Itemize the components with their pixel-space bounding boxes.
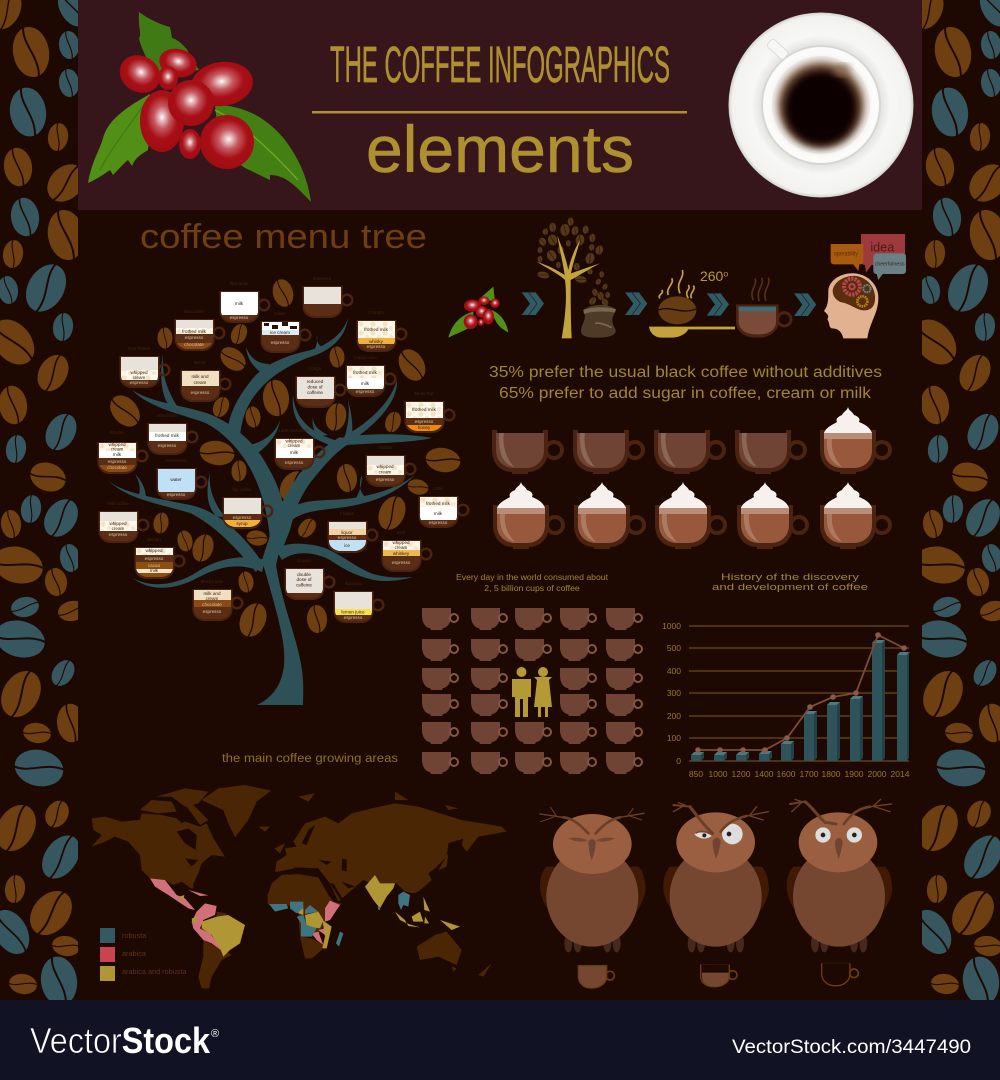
menu cups: whipped [109,521,127,526]
heading: coffee menu tree: coffee menu tree [140,218,427,256]
chart: history of coffee: 1000 [662,621,681,631]
robusta regions [269,892,410,947]
menu cups: espresso [338,535,357,540]
menu cups: whisky [369,339,384,344]
land [92,785,507,988]
menu cups: milk and [203,591,221,596]
chart: history of coffee: 400 [667,666,681,676]
menu cups: espresso [158,443,177,448]
pictogram: cup grid with people [422,608,642,774]
footer bar: ® [211,1028,219,1040]
menu cups: milk [290,450,299,455]
process: from berry to brain [448,217,906,338]
world map [92,785,507,988]
owl: wide awake [787,799,892,952]
menu cups: Frappe [340,511,355,516]
menu cups: cream [111,446,124,452]
chart: history of coffee: 850 [689,769,703,779]
menu cups: Lungo [309,366,322,371]
chart: history of coffee: 1200 [732,769,751,779]
menu cups: dose of [307,384,323,390]
caption: daily consumption: Every day in the world consumed about [456,572,609,582]
menu cups: Macchiato [157,413,178,418]
menu cups: Glace [274,311,286,316]
arabica regions [150,878,340,951]
cup: empty [822,963,858,986]
menu cups: Bicerin [147,537,161,542]
menu cups: Corretto [368,310,384,315]
chart: history of coffee: 1700 [800,769,819,779]
menu cups: dose of [296,577,312,582]
menu cups: Flat white [230,281,249,286]
legend: coffee types: robusta [122,931,147,940]
menu cups: chocolate [184,342,204,347]
menu cups: milk [150,568,159,573]
chart: history of coffee: 1000 [709,769,728,779]
legend: coffee types [100,928,187,981]
menu cups: espresso [415,419,434,424]
seas [177,825,463,902]
statistic text: black coffee vs additions: 35% prefer the usual black coffee without additives [489,364,882,381]
menu cups: chocolate [202,602,222,607]
icon: man and woman [512,667,552,717]
menu cups: espresso [167,492,186,497]
menu cups: Mocha latte [201,579,224,584]
menu cups: espresso [130,380,149,385]
menu cups: espresso [233,515,252,520]
chart: history of coffee [662,572,910,779]
menu cups: Latte macchiato [278,428,310,433]
menu cups: double [297,572,311,577]
cup: full [578,966,614,988]
icon: coffee berries with leaves [88,12,311,202]
menu cups: liquor [341,530,353,535]
menu cups: espresso [203,609,222,614]
menu cups: Macchiato [184,309,205,314]
menu cups: whipped [145,548,163,553]
menu cups: milk and [191,374,209,379]
chart: history of coffee: 1900 [845,769,864,779]
menu cups: caffeine [296,582,312,588]
menu cups: ice [344,543,350,548]
coffee tree [98,276,468,705]
owl: half awake [663,803,769,952]
menu cups: lemon juice [341,610,365,614]
menu cups: cacao [148,563,161,568]
menu cups [98,276,468,623]
menu cups: reduced [307,379,324,384]
menu cups: milk [434,511,443,516]
menu cups: espresso [344,615,363,620]
menu cups: water [170,477,182,482]
menu cups: whipped [108,442,126,447]
icon: coffee cup with steam [736,278,791,338]
menu cups: Mocha [110,430,124,435]
menu cups: frothed milk [353,370,378,375]
cup: half [701,964,737,987]
menu cups: Espresso [313,276,332,281]
chart: history of coffee: 1400 [755,769,774,779]
menu cups: espresso [145,556,164,561]
menu cups: caffeine [307,390,323,395]
menu cups: cream [379,470,392,474]
chart: history of coffee: 2000 [868,769,887,779]
pattern: right coffee bean column [905,0,1000,1008]
menu cups: espresso [230,315,249,320]
header panel [78,0,922,210]
menu cups: Breve [194,360,206,365]
menu cups: frothed milk [412,407,437,412]
menu cups: flat coffee [233,487,252,492]
arrow [707,293,729,316]
menu cups: whipped [392,540,410,545]
menu cups: milk [361,381,370,386]
statistic text: black coffee vs additions [489,364,882,402]
menu cups: espresso [429,520,448,525]
footer bar [0,1000,1000,1080]
menu cups: espresso [392,560,411,565]
chart: history of coffee: and development of coffee [712,582,868,593]
menu cups: whipped [285,438,303,444]
icon: head with gears and speech bubbles: operability [834,252,858,258]
menu cups: Mead Raf [414,391,434,396]
menu cups: chocolate [107,465,127,470]
icon: head with gears and speech bubbles: cheerfulness [875,262,905,268]
image reference: VectorStock.com/3447490 [732,1036,971,1058]
chart: history of coffee: 500 [667,643,681,653]
menu cups: frothed milk [364,327,389,332]
menu cups: espresso [109,532,128,537]
arrow [522,292,544,315]
chart: history of coffee: 0 [676,756,681,766]
caption: daily consumption [456,572,609,593]
menu cups: frothed milk [426,501,451,506]
menu cups: cream [206,596,219,601]
chart: history of coffee: 300 [667,688,681,698]
chart: history of coffee: 100 [667,733,681,743]
menu cups: frothed milk [155,433,180,438]
tree trunk and branches [108,318,432,705]
icon: head with gears and speech bubbles [824,234,906,338]
chart: history of coffee: 1800 [822,769,841,779]
caption: daily consumption: 2, 5 billion cups of coffee [484,583,580,593]
arrow [625,292,647,315]
menu cups: whiskey [393,551,410,556]
logo: VectorStock: VectorStock [30,1020,211,1061]
chart: history of coffee: 1600 [777,769,796,779]
arrow [794,293,816,316]
legend: coffee types: arabica [122,949,147,958]
label: 260 degrees: o [723,268,728,278]
pattern: left coffee bean column [0,0,94,1008]
owls with coffee cups [540,799,892,988]
menu cups: milk [113,452,122,457]
icon: head with gears and speech bubbles: idea [870,241,895,255]
label: 260 degrees: 260 [700,268,723,284]
icon: small coffee berries [448,287,508,338]
chart: history of coffee: History of the discovery [721,572,859,583]
menu cups: milk [235,301,244,306]
subtitle: elements [366,112,634,186]
menu cups: Vienna [378,445,392,450]
menu cups: honey [418,425,431,430]
menu cups: espresso [271,340,290,345]
menu cups: ice cream [270,330,290,335]
menu cups: Cappuccino [353,355,377,360]
bars [691,640,910,761]
legend: coffee types: arabica and robusta [122,967,187,976]
menu cups: Con Panna [128,346,151,351]
pictogram: ten coffee cups [492,407,890,549]
menu cups: frothed milk [182,329,207,334]
menu cups: espresso [367,344,386,349]
menu cups: espresso [376,477,395,482]
menu cups: Latte [433,486,443,491]
menu cups: cream [133,375,146,380]
menu cups: cream [395,545,408,550]
icon: coffee cup from above [728,12,914,198]
menu cups: Americano [166,458,187,463]
menu cups: syrup [236,521,248,526]
trend line [695,632,907,753]
heading: growing areas: the main coffee growing areas [222,753,398,765]
chart: history of coffee: 2014 [891,769,910,779]
icon: coffee sack [581,305,616,338]
tree beans [104,277,462,641]
menu cups: whipped [130,370,148,375]
menu cups: whipped [376,464,394,469]
menu cups: espresso [191,390,210,395]
statistic text: black coffee vs additions: 65% prefer to add sugar in coffee, cream or milk [499,385,871,402]
menu cups: cream [288,443,301,448]
menu cups: Irish [397,530,406,535]
menu cups: cream [194,380,207,385]
menu cups: Romano [345,581,362,586]
icon: golden coffee tree [537,217,610,338]
menu cups: Doppio [297,558,312,563]
menu cups: espresso [185,335,204,340]
menu cups: Irish coffee [107,501,129,506]
icon: roasting bean in pan with steam [649,270,735,338]
menu cups: espresso [285,460,304,465]
menu cups: espresso [108,459,127,464]
owl: asleep [540,807,646,952]
menu cups: cream [112,526,125,531]
chart: history of coffee: 200 [667,711,681,721]
arabica and robusta regions [179,875,460,957]
menu cups: espresso [356,389,375,394]
